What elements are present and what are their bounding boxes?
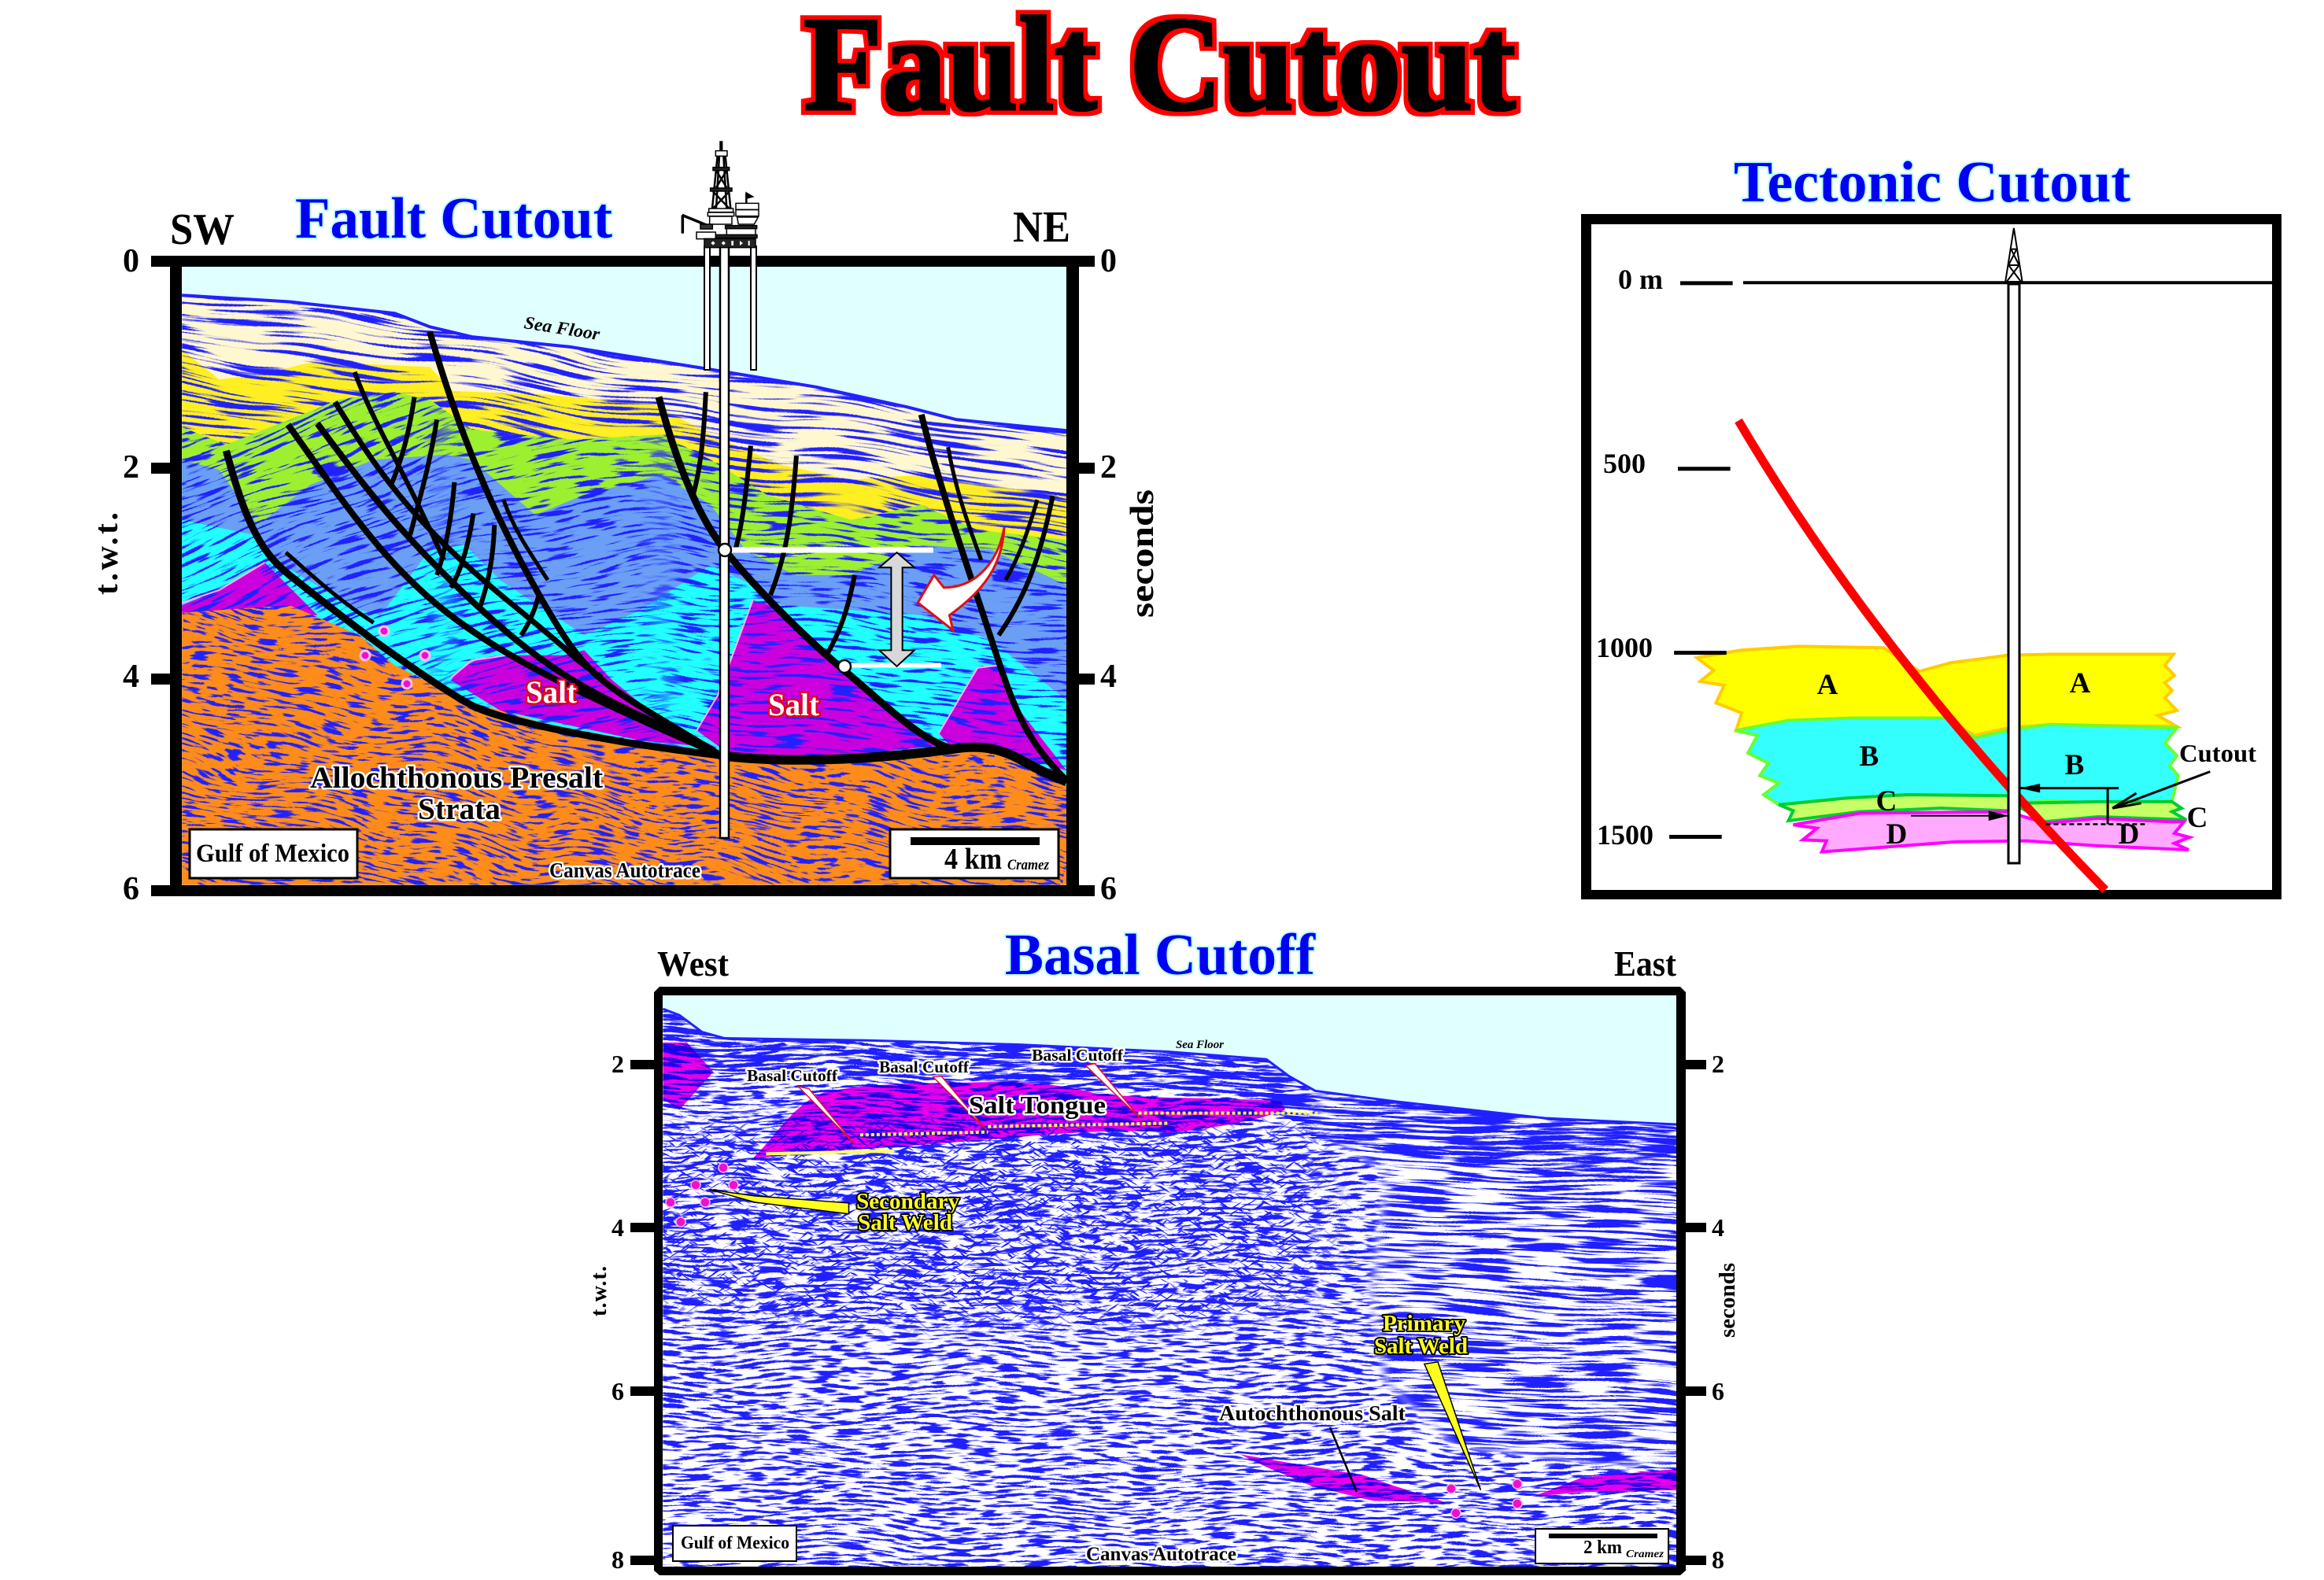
strata layers bbox=[1697, 646, 2189, 852]
axis numbers left and right: 6 bbox=[1100, 871, 1117, 907]
label: Primary Salt Weld: Primary bbox=[1383, 1311, 1466, 1336]
label: Primary Salt Weld bbox=[1374, 1311, 1468, 1359]
label: Cutout: Cutout bbox=[2179, 739, 2256, 767]
location box: Gulf of Mexico bbox=[673, 1526, 796, 1561]
location box: Gulf of Mexico bbox=[190, 829, 357, 878]
axis numbers left and right: 8 bbox=[611, 1545, 624, 1574]
label: Canvas Autotrace: Canvas Autotrace bbox=[1086, 1544, 1236, 1565]
labels: Basal Cutoff pointers: Basal Cutoff bbox=[1032, 1046, 1124, 1065]
axis numbers left and right: 2 bbox=[123, 449, 139, 485]
panel: fault cutout seismic section bbox=[61, 137, 1167, 1026]
location box: Gulf of Mexico: Gulf of Mexico bbox=[196, 840, 349, 868]
layer A bbox=[1697, 646, 2177, 736]
well bore bbox=[720, 245, 729, 838]
label: SW: SW bbox=[170, 205, 235, 254]
scale bar: 4 km: 4 km bbox=[944, 843, 1002, 876]
axis numbers left and right bbox=[611, 1050, 1724, 1574]
labels: Basal Cutoff pointers: Basal Cutoff bbox=[879, 1058, 970, 1076]
label: Salt left: Salt bbox=[526, 674, 578, 710]
label: Allochthonous Presalt Strata bbox=[310, 761, 603, 826]
basal cutoff pointers bbox=[798, 1064, 1140, 1143]
axis numbers left and right: 4 bbox=[123, 659, 139, 695]
layer D bbox=[1794, 812, 2189, 852]
layer B bbox=[1736, 718, 2178, 805]
layer letters: A bbox=[2070, 667, 2091, 700]
label: Autochthonous Salt: Autochthonous Salt bbox=[1219, 1401, 1406, 1425]
depth labels: 500 bbox=[1603, 448, 1646, 479]
sea and ground bbox=[663, 995, 1676, 1567]
sea floor reflector bbox=[663, 1009, 1676, 1124]
red fault bbox=[1738, 421, 2105, 890]
axis numbers left and right: 0 bbox=[123, 243, 139, 279]
frame and axis ticks bbox=[151, 256, 1095, 896]
labels: Basal Cutoff pointers: Basal Cutoff bbox=[747, 1066, 838, 1085]
cutout measurement arrows bbox=[1911, 772, 2210, 825]
autochthonous salt leader bbox=[1330, 1427, 1357, 1492]
salt bodies bbox=[663, 1043, 1676, 1503]
salt weld dots bbox=[360, 626, 430, 688]
layer letters: C bbox=[2187, 802, 2208, 834]
heading: Fault Cutout: Fault Cutout bbox=[295, 186, 612, 251]
layer letters: C bbox=[1876, 785, 1897, 818]
layer C bbox=[1779, 795, 2186, 821]
scale bar: 2 km: 2 km bbox=[1583, 1538, 1622, 1558]
layer letters bbox=[1817, 667, 2208, 851]
axis numbers left and right: 4 bbox=[1712, 1213, 1724, 1242]
label: Secondary Salt Weld: Secondary bbox=[856, 1189, 960, 1214]
offshore platform legs bbox=[704, 246, 756, 370]
axis numbers left and right: 6 bbox=[611, 1377, 624, 1405]
seismic reflector texture bbox=[182, 295, 1066, 885]
scale bar: 2 km: Cramez bbox=[1626, 1549, 1664, 1560]
axis numbers left and right: 6 bbox=[1712, 1377, 1724, 1405]
layer letters: B bbox=[1860, 740, 1879, 773]
axis numbers left and right: 4 bbox=[1100, 659, 1117, 695]
frame and axis ticks bbox=[630, 987, 1706, 1575]
layer letters: D bbox=[1886, 818, 1907, 851]
scale bar: 4 km: Cramez bbox=[1007, 857, 1050, 873]
layer letters: D bbox=[2119, 818, 2139, 851]
yellow weld arrows bbox=[710, 1190, 1481, 1490]
icon: offshore platform bbox=[682, 142, 759, 248]
label: Salt Tongue: Salt Tongue bbox=[969, 1091, 1106, 1119]
depth labels bbox=[1596, 264, 1663, 851]
label: Secondary Salt Weld bbox=[856, 1189, 960, 1235]
heading: Tectonic Cutout: Tectonic Cutout bbox=[1734, 150, 2130, 215]
layer letters: B bbox=[2065, 749, 2084, 781]
label: NE: NE bbox=[1013, 203, 1070, 252]
axis title: t.w.t.: t.w.t. bbox=[587, 1266, 611, 1316]
salt edges bbox=[182, 563, 999, 733]
axis title: seconds: seconds bbox=[1125, 489, 1161, 618]
panel: basal cutoff seismic section bbox=[593, 932, 1735, 1575]
seismic reflector texture bbox=[663, 1010, 1676, 1567]
scale bar: 2 km bbox=[1535, 1529, 1668, 1563]
basal cutoff dotted horizons bbox=[766, 1113, 1319, 1154]
axis numbers left and right: 8 bbox=[1712, 1545, 1724, 1574]
sea floor reflector bbox=[182, 295, 1066, 430]
location box: Gulf of Mexico: Gulf of Mexico bbox=[681, 1533, 789, 1552]
label: Sea Floor: Sea Floor bbox=[1176, 1039, 1224, 1051]
well cut points bbox=[719, 544, 851, 673]
depth labels: 0 m bbox=[1618, 264, 1663, 295]
depth ticks and surface line bbox=[1669, 282, 2272, 836]
axis title: t.w.t.: t.w.t. bbox=[89, 512, 125, 595]
label: Secondary Salt Weld: Salt Weld bbox=[858, 1210, 952, 1235]
depth labels: 1000 bbox=[1596, 632, 1653, 663]
diagram frame bbox=[1581, 214, 2282, 899]
axis numbers left and right: 2 bbox=[1100, 449, 1117, 485]
label: Canvas Autotrace: Canvas Autotrace bbox=[549, 858, 700, 882]
curved callout arrow bbox=[918, 527, 1004, 630]
well bore bbox=[2008, 284, 2019, 863]
fault cut markers and throw arrow bbox=[728, 550, 941, 666]
label: Salt right: Salt bbox=[768, 687, 820, 722]
labels: Basal Cutoff pointers bbox=[747, 1046, 1124, 1085]
depth labels: 1500 bbox=[1597, 819, 1653, 851]
scale bar: 4 km bbox=[890, 829, 1059, 878]
panel: tectonic cutout diagram bbox=[1581, 150, 2282, 899]
label: Allochthonous Presalt Strata: Strata bbox=[418, 792, 501, 826]
axis numbers left and right: 0 bbox=[1100, 243, 1117, 279]
label: West: West bbox=[657, 943, 730, 984]
axis numbers left and right bbox=[123, 243, 1117, 907]
layer letters: A bbox=[1817, 669, 1838, 701]
axis numbers left and right: 2 bbox=[1712, 1050, 1724, 1078]
label: Allochthonous Presalt Strata: Allochthonous Presalt bbox=[310, 761, 603, 795]
salt weld dots bbox=[666, 1163, 1522, 1518]
axis numbers left and right: 6 bbox=[123, 871, 139, 907]
label: East: East bbox=[1614, 943, 1677, 984]
axis numbers left and right: 2 bbox=[611, 1050, 624, 1078]
axis title: seconds: seconds bbox=[1716, 1263, 1740, 1338]
label: Sea Floor: Sea Floor bbox=[523, 312, 602, 344]
heading: Basal Cutoff: Basal Cutoff bbox=[1005, 923, 1316, 988]
geological layers bbox=[182, 267, 1066, 885]
label: Primary Salt Weld: Salt Weld bbox=[1374, 1334, 1468, 1359]
icon: drilling derrick bbox=[2005, 228, 2023, 282]
fault traces bbox=[226, 332, 1066, 781]
axis numbers left and right: 4 bbox=[611, 1213, 624, 1242]
